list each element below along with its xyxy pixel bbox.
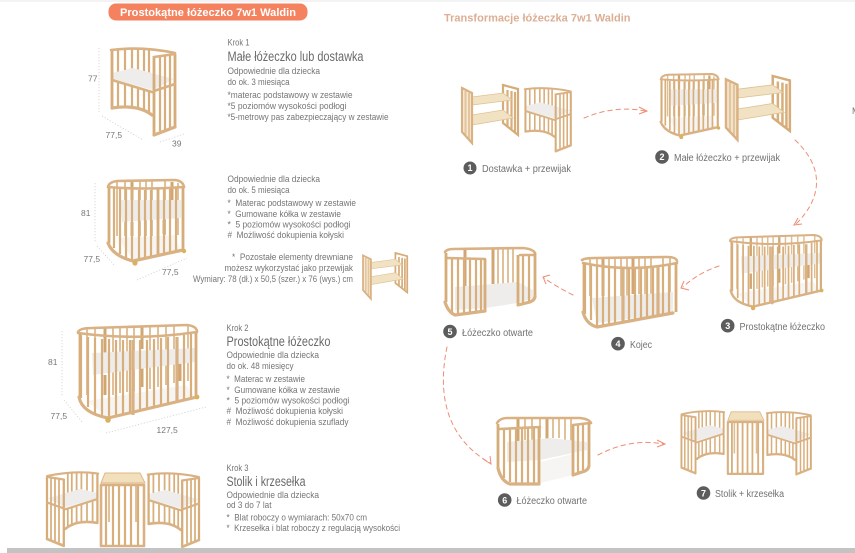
transformation 7: Stolik + krzesełka xyxy=(681,411,811,500)
transformation 1: Dostawka + przewijak: Dostawka + przewijak xyxy=(482,164,572,175)
5-month crib with dimensions: 77,5 xyxy=(162,267,179,277)
arrow 2 to 3 xyxy=(794,140,817,225)
transformation 5: Łóżeczko otwarte: 5 xyxy=(447,327,453,337)
step 2 text xyxy=(226,323,350,428)
transformation 1: Dostawka + przewijak xyxy=(462,85,572,175)
step 1 text xyxy=(228,38,388,123)
5-month crib text: Odpowiednie dla dziecka xyxy=(228,174,321,185)
5-month crib text: do ok. 5 miesiąca xyxy=(228,185,290,196)
changing table note: * Pozostałe elementy drewniane xyxy=(232,252,353,263)
5-month crib with dimensions: 77,5 xyxy=(84,254,100,264)
transformation 3: Prostokątne łóżeczko: 3 xyxy=(725,321,730,331)
step 1 crib with dimensions: 39 xyxy=(172,138,182,148)
step 2 text: Odpowiednie dla dziecka xyxy=(226,350,320,361)
step 1 crib with dimensions xyxy=(88,48,184,148)
step 3 text: od 3 do 7 lat xyxy=(226,500,272,511)
transformation 4: Kojec: Kojec xyxy=(630,340,652,351)
step 2 crib with dimensions: 127,5 xyxy=(156,425,178,435)
5-month crib with dimensions xyxy=(81,180,187,280)
step 2 crib with dimensions: 77,5 xyxy=(50,411,67,421)
arrow 1 to 2 xyxy=(584,107,647,118)
transformation 6: Łóżeczko otwarte: Łóżeczko otwarte xyxy=(516,496,587,507)
step 2 text: # Możliwość dokupienia kołyski xyxy=(226,406,343,417)
changing table note: Wymiary: 78 (dł.) x 50,5 (szer.) x 76 (wys.) cm xyxy=(193,274,353,285)
left panel: Prostokątne łóżeczko 7w1 Waldin xyxy=(47,4,407,547)
transformation 3: Prostokątne łóżeczko: Prostokątne łóżeczko xyxy=(740,322,825,333)
right panel: Transformacje łóżeczka 7w1 Waldin xyxy=(443,12,825,507)
5-month crib text: # Możliwość dokupienia kołyski xyxy=(228,230,344,241)
changing table image xyxy=(363,253,407,299)
top strip xyxy=(0,0,855,2)
step 2 text: do ok. 48 miesięcy xyxy=(226,361,294,372)
right heading: Transformacje łóżeczka 7w1 Waldin xyxy=(444,12,631,24)
transformation 2: Małe łóżeczko + przewijak: 2 xyxy=(659,152,665,162)
changing table note: możesz wykorzystać jako przewijak xyxy=(224,263,353,274)
step 1 text: *5 poziomów wysokości podłogi xyxy=(228,101,346,112)
5-month crib text: * Gumowane kółka w zestawie xyxy=(228,209,341,220)
step 2 crib with dimensions: 81 xyxy=(48,357,58,367)
transformation 6: Łóżeczko otwarte xyxy=(497,418,591,507)
step 2 text: Prostokątne łóżeczko xyxy=(226,334,330,349)
step 3 text: * Krzesełka i blat roboczy z regulacją wysokości xyxy=(226,523,400,534)
step 1 text: Krok 1 xyxy=(228,38,250,48)
step 3 text: Krok 3 xyxy=(226,463,248,473)
step 3 text: Stolik i krzesełka xyxy=(226,474,306,489)
transformation 4: Kojec: 4 xyxy=(615,339,621,349)
step 3 text: * Blat roboczy o wymiarach: 50x70 cm xyxy=(226,512,367,524)
step 2 text: # Możliwość dokupienia szuflady xyxy=(226,417,349,428)
arrow 6 to 7 xyxy=(598,440,665,455)
5-month crib text xyxy=(228,174,356,241)
arrow 5 to 6 xyxy=(443,347,491,464)
step 1 text: *5-metrowy pas zabezpieczający w zestawie xyxy=(228,112,388,123)
transformation 1: Dostawka + przewijak: 1 xyxy=(467,163,473,173)
transformation 5: Łóżeczko otwarte: Łóżeczko otwarte xyxy=(462,328,533,339)
step 1 text: Małe łóżeczko lub dostawka xyxy=(228,49,364,64)
step 1 crib with dimensions: 77,5 xyxy=(106,130,122,140)
step 1 crib with dimensions: 77 xyxy=(88,74,98,84)
step 3 table and chairs xyxy=(47,472,199,547)
transformation 6: Łóżeczko otwarte: 6 xyxy=(502,495,507,505)
5-month crib with dimensions: 81 xyxy=(81,208,91,218)
step 2 crib with dimensions xyxy=(48,325,206,435)
arrow 3 to 4 xyxy=(681,266,719,290)
transformation 2: Małe łóżeczko + przewijak: Małe łóżeczko + przewijak xyxy=(674,153,781,164)
step 1 text: *materac podstawowy w zestawie xyxy=(228,90,352,101)
transformation 4: Kojec xyxy=(582,257,677,351)
transformation 3: Prostokątne łóżeczko xyxy=(721,235,825,333)
step 2 text: Krok 2 xyxy=(226,323,248,333)
5-month crib text: * 5 poziomów wysokości podłogi xyxy=(228,220,350,230)
transformation 2: Małe łóżeczko + przewijak xyxy=(655,74,790,164)
transformation 7: Stolik + krzesełka: 7 xyxy=(701,488,706,498)
heading pill: Prostokątne łóżeczko 7w1 Waldin xyxy=(120,7,296,19)
heading pill xyxy=(108,4,308,20)
transformation 5: Łóżeczko otwarte xyxy=(443,248,535,339)
step 2 text: * Gumowane kółka w zestawie xyxy=(226,385,340,396)
step 2 text: * Materac w zestawie xyxy=(226,374,305,385)
step 3 text: Odpowiednie dla dziecka xyxy=(226,490,320,501)
step 2 text: * 5 poziomów wysokości podłogi xyxy=(226,396,350,406)
5-month crib text: * Materac podstawowy w zestawie xyxy=(228,198,356,209)
arrow 4 to 5 xyxy=(543,275,573,295)
bottom grey bar xyxy=(7,548,855,553)
step 1 text: Odpowiednie dla dziecka xyxy=(228,66,321,77)
step 1 text: do ok. 3 miesiąca xyxy=(228,77,290,88)
transformation 7: Stolik + krzesełka: Stolik + krzesełka xyxy=(715,489,784,500)
changing table note xyxy=(193,252,353,285)
step 3 text xyxy=(226,463,400,534)
